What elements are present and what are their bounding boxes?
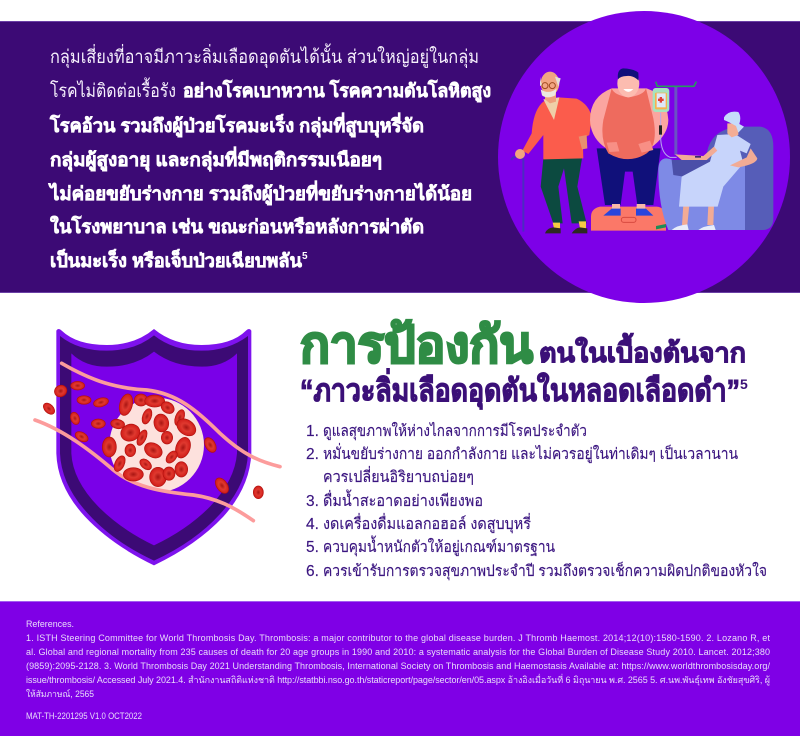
heading: prevention: “ภาวะลิ่มเลือดอุดตันในหลอดเลือดดำ”: [300, 368, 740, 410]
text block: references: 1. ISTH Steering Committee for World Thrombosis Day. Thrombosis: a major contributor to the global disease burden. J Thromb Haemost. 2014;12(10):1580-1590. 2. Lozano R, et: [26, 633, 770, 643]
red blood cells: [41, 381, 263, 499]
text block: risk groups: ในโรงพยาบาล เช่น ขณะก่อนหรือหลังการผ่าตัด: [50, 215, 424, 237]
list: prevention steps: 1.: [306, 423, 319, 440]
text block: references: al. Global and regional mortality from 235 causes of death for 20 age groups in 1990 and 2010: a systematic analysis for the Global Burden of Disease Study 2010. Lancet. 2012;380: [26, 647, 770, 657]
text block: risk groups: [48, 43, 491, 271]
list: prevention steps: หมั่นขยับร่างกาย ออกกำลังกาย และไม่ควรอยู่ในท่าเดิมๆ เป็นเวลานาน: [323, 443, 738, 464]
list: prevention steps: ดูแลสุขภาพให้ห่างไกลจากการมีโรคประจำตัว: [323, 422, 587, 441]
text block: material code: MAT-TH-2201295 V1.0 OCT2022: [26, 711, 142, 721]
list: prevention steps: ควรเปลี่ยนอิริยาบถบ่อยๆ: [323, 466, 474, 486]
list: prevention steps: ควบคุมน้ำหนักตัวให้อยู่เกณฑ์มาตรฐาน: [323, 535, 555, 557]
icon: shield: [56, 329, 251, 565]
text block: risk groups: ไม่ค่อยขยับร่างกาย รวมถึงผู้ป่วยที่ขยับร่างกายได้น้อย: [48, 180, 472, 206]
icon: elderly man with cane: [511, 72, 592, 233]
icon: IV drip stand: [653, 82, 696, 157]
heading: prevention: [300, 317, 748, 410]
text block: risk groups: กลุ่มผู้สูงอายุ และกลุ่มที่มีพฤติกรรมเนือยๆ: [50, 146, 382, 172]
text block: references: issue/thrombosis/ Accessed July 2021.4. สำนักงานสถิติแห่งชาติ http://statbbi.nso.go.th/staticreport/page/sector/en/05.aspx อ้างอิงเมื่อวันที่ 6 มิถุนายน พ.ศ. 2565 5. ศ.นพ.พันธุ์เทพ อังชัยสุขศิริ, ผู้: [26, 673, 770, 686]
list: prevention steps: 2.: [306, 446, 319, 463]
text block: references: References.: [26, 619, 74, 629]
panel: risk groups band: [0, 21, 800, 293]
text block: references: ให้สัมภาษณ์, 2565: [26, 688, 94, 699]
panel: references footer: [0, 601, 800, 736]
text block: risk groups: โรคไม่ติดต่อเรื้อรัง: [50, 77, 176, 101]
list: prevention steps: 4.: [306, 516, 319, 533]
illustration: circle with at-risk people: [498, 11, 790, 303]
vein walls: [35, 363, 280, 521]
illustration: shield with blood clot in vein: [35, 329, 280, 565]
text block: risk groups: กลุ่มเสี่ยงที่อาจมีภาวะลิ่มเลือดอุดตันได้นั้น ส่วนใหญ่อยู่ในกลุ่ม: [50, 43, 479, 69]
text block: risk groups: โรคอ้วน รวมถึงผู้ป่วยโรคมะเร็ง กลุ่มที่สูบบุหรี่จัด: [49, 112, 424, 138]
list: prevention steps: [306, 422, 767, 581]
text block: risk groups: 5: [302, 251, 308, 262]
heading: prevention: การป้องกัน: [300, 317, 533, 373]
heading: prevention: 5: [740, 376, 748, 392]
icon: patient in armchair: [658, 112, 773, 230]
heading: prevention: ตนในเบื้องต้นจาก: [539, 332, 746, 368]
text block: risk groups: เป็นมะเร็ง หรือเจ็บป่วยเฉียบพลัน: [50, 248, 302, 271]
icon: overweight man on scale: [590, 68, 668, 231]
list: prevention steps: 3.: [306, 493, 319, 510]
blood clot: [109, 398, 204, 492]
text block: references: (9859):2095-2128. 3. World Thrombosis Day 2021 Understanding Thrombosis, International Society on Thrombosis and Haemostasis Available at: https://www.worldthrombosisday.org/: [26, 661, 770, 671]
list: prevention steps: ดื่มน้ำสะอาดอย่างเพียงพอ: [323, 489, 483, 510]
text block: references: [26, 619, 770, 699]
list: prevention steps: 6.: [306, 563, 319, 580]
list: prevention steps: งดเครื่องดื่มแอลกอฮอล์ งดสูบบุหรี่: [323, 513, 531, 534]
list: prevention steps: 5.: [306, 539, 319, 556]
text block: risk groups: อย่างโรคเบาหวาน โรคความดันโลหิตสูง: [183, 79, 491, 103]
